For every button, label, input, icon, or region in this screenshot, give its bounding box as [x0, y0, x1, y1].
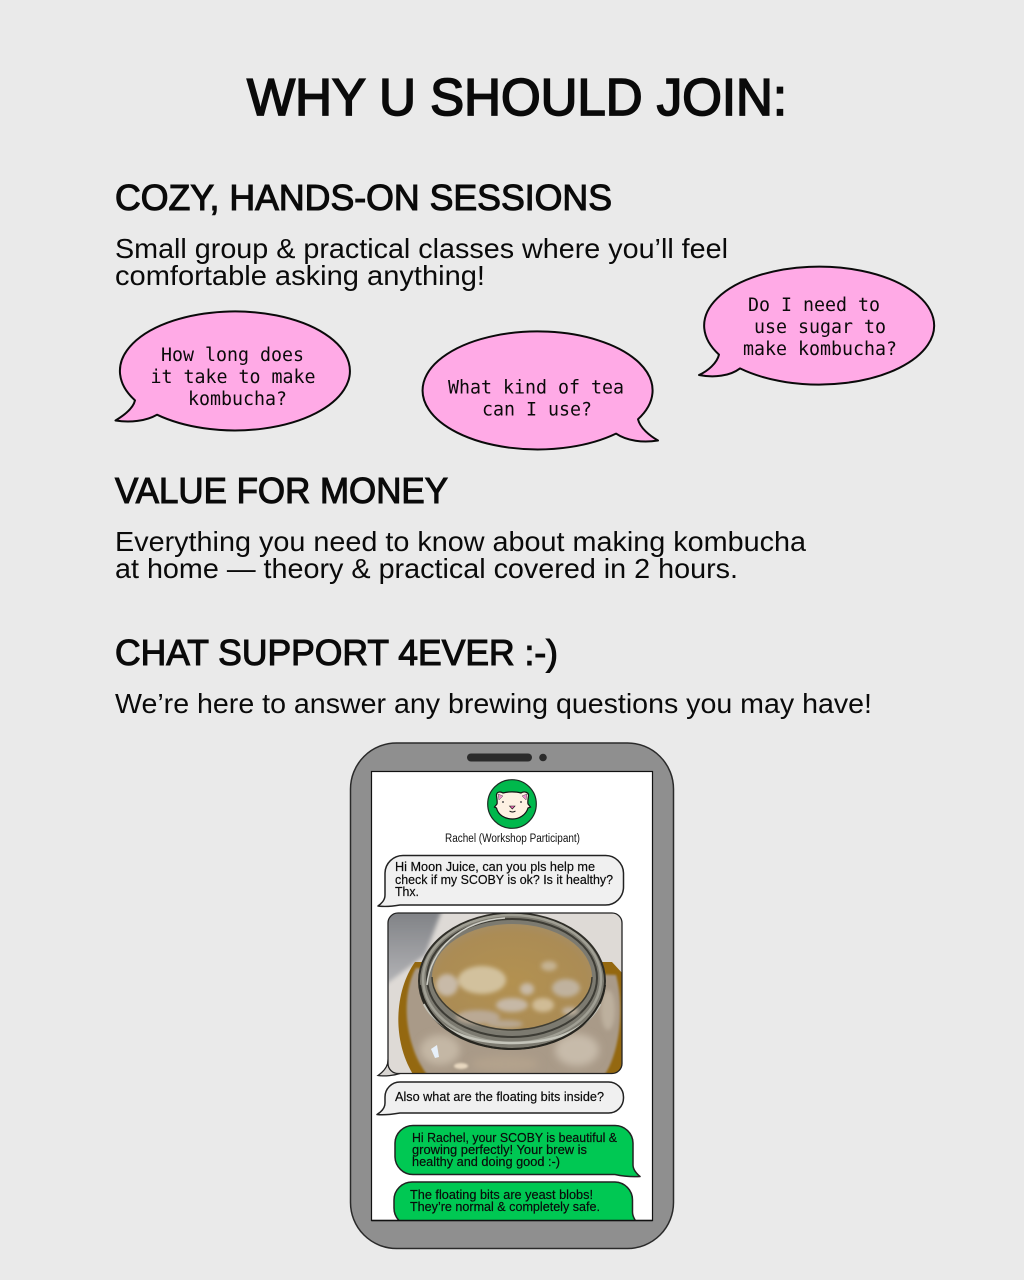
heading: chat support: CHAT SUPPORT 4EVER :-): [115, 632, 558, 673]
speech bubble: what kind of tea: [423, 331, 658, 449]
participant name: Rachel (Workshop Participant): [445, 833, 580, 845]
speaker and camera: [467, 754, 547, 762]
chat bubble: scoby question: Thx.: [395, 884, 419, 899]
phone screen: [372, 772, 652, 1220]
speech bubble: how long does it take: kombucha?: [188, 389, 287, 410]
avatar: bear on green circle: [488, 780, 536, 828]
chat bubble: scoby question: [378, 855, 624, 906]
chat bubble: scoby reply: healthy and doing good :-): [412, 1154, 560, 1169]
text block: everything you need: Everything you need to know about making kombucha: [115, 526, 806, 557]
rim: [419, 913, 605, 1049]
speech bubble: how long does it take: [116, 311, 350, 430]
chat bubble: yeast blobs reply: The floating bits are yeast blobs!: [410, 1187, 593, 1202]
chat bubble: scoby reply: [395, 1126, 640, 1177]
highlights: [431, 1045, 439, 1058]
liquid and scoby: [432, 924, 592, 1030]
speech bubble: how long does it take: it take to make: [150, 367, 315, 388]
screen bottom edge: [372, 1220, 652, 1222]
chat bubble: yeast blobs reply: They’re normal & completely safe.: [410, 1199, 600, 1214]
heading: cozy, hands-on sessions: COZY, HANDS-ON SESSIONS: [115, 177, 612, 218]
chat bubble: scoby question: check if my SCOBY is ok? Is it healthy?: [395, 872, 613, 887]
speech bubble: how long does it take: How long does: [161, 345, 304, 366]
heading: value for money: VALUE FOR MONEY: [115, 470, 448, 511]
speech bubble: what kind of tea: can I use?: [482, 400, 592, 420]
jar body: [398, 962, 624, 1076]
speech bubble: do I need sugar: Do I need to: [748, 295, 880, 316]
text block: small group classes: comfortable asking anything!: [115, 260, 485, 291]
text block: small group classes: [115, 233, 728, 291]
speech bubble: what kind of tea: What kind of tea: [448, 378, 624, 398]
section: cozy, hands-on sessions: [115, 177, 728, 291]
chat bubble: yeast blobs reply: [393, 1181, 636, 1220]
chat bubble: scoby reply: Hi Rachel, your SCOBY is beautiful &: [412, 1130, 617, 1145]
section: value for money: [115, 470, 806, 584]
speech bubble: do I need sugar: [699, 267, 934, 385]
chat bubble: scoby reply: growing perfectly! Your brew is: [412, 1142, 587, 1157]
speech bubble: do I need sugar: make kombucha?: [743, 339, 897, 360]
text block: everything you need: [115, 526, 806, 584]
title: WHY U SHOULD JOIN:: [247, 69, 787, 127]
chat bubble: floating bits: Also what are the floating bits inside?: [395, 1089, 604, 1104]
speech bubble: do I need sugar: use sugar to: [754, 317, 886, 338]
text block: here to answer: We’re here to answer any brewing questions you may have!: [115, 688, 872, 719]
chat photo: jar of scoby: [378, 910, 624, 1076]
phone mockup: [350, 743, 674, 1248]
phone body: [350, 743, 674, 1248]
section: chat support: [115, 632, 872, 719]
text block: small group classes: Small group & practical classes where you’ll feel: [115, 233, 728, 264]
chat bubble: floating bits: [377, 1082, 624, 1115]
chat bubble: scoby question: Hi Moon Juice, can you pls help me: [395, 859, 595, 874]
text block: everything you need: at home — theory & practical covered in 2 hours.: [115, 553, 738, 584]
